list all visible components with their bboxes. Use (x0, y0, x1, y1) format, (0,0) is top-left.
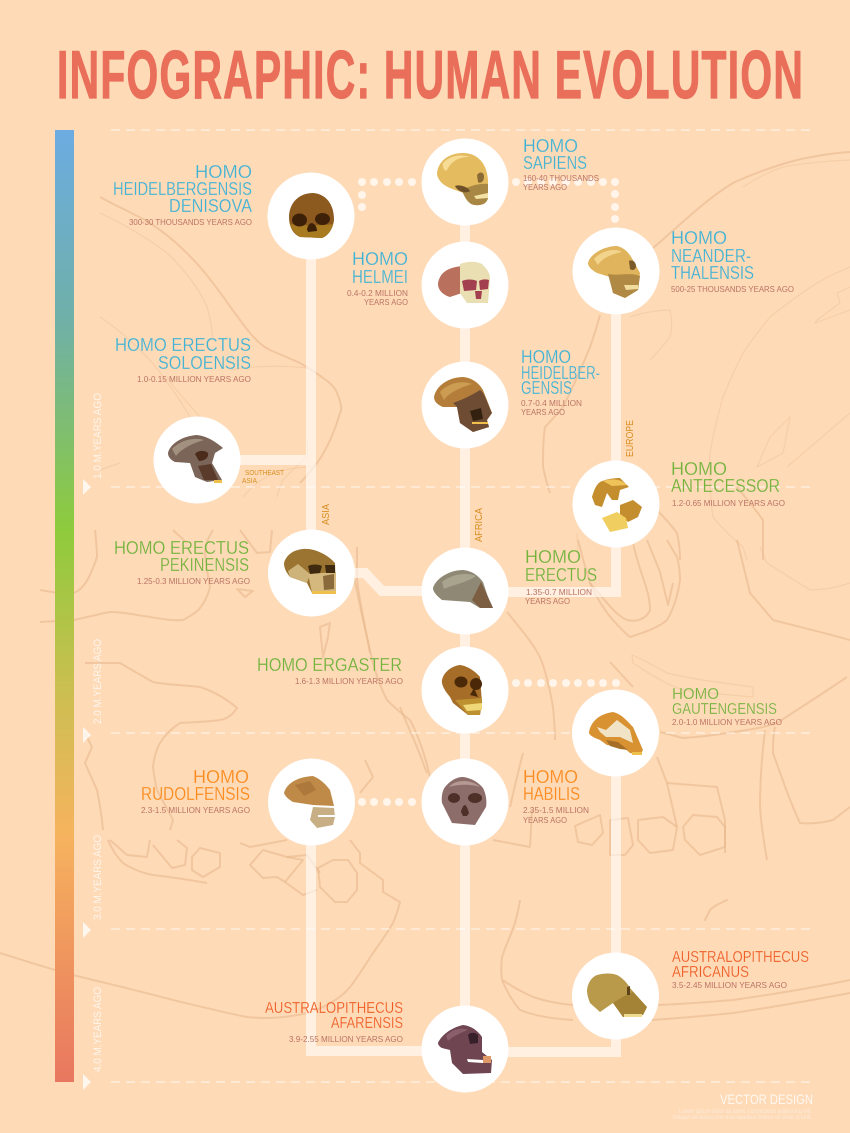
label: homo gautengensis (672, 686, 782, 727)
label: homo sapiens (523, 136, 599, 192)
label: homo habilis: HABILIS (523, 784, 580, 804)
label: homo sapiens: SAPIENS (523, 153, 587, 173)
skull: homo gautengensis (572, 690, 659, 776)
skull: homo habilis (422, 758, 508, 846)
timeline labels: 3.0 M.YEARS AGO (92, 835, 104, 920)
label: homo antecessor (671, 459, 785, 508)
label: homo erectus: YEARS AGO (525, 596, 570, 606)
label: homo habilis: YEARS AGO (523, 815, 567, 825)
time divider dashed lines (111, 130, 813, 1082)
label: homo gautengensis: HOMO (672, 686, 719, 703)
label: australopithecus afarensis: AUSTRALOPITHECUS (265, 1000, 403, 1017)
label: homo rudolfensis: 2.3-1.5 MILLION YEARS AGO (141, 805, 250, 815)
label: homo heidelbergensis denisova: HEIDELBERGENSIS (113, 179, 252, 199)
label: homo neanderthalensis (671, 228, 794, 294)
skull: homo helmei (422, 242, 508, 328)
region labels: EUROPE (625, 420, 636, 457)
label: homo neanderthalensis: NEANDER- (671, 246, 751, 266)
label: homo antecessor: ANTECESSOR (671, 476, 780, 496)
label: homo heidelbergensis: 0.7-0.4 MILLION (521, 398, 582, 408)
label: homo erectus soloensis: 1.0-0.15 MILLION YEARS AGO (137, 374, 251, 384)
label: australopithecus africanus: AFRICANUS (672, 964, 749, 981)
label: homo erectus soloensis: HOMO ERECTUS (115, 335, 251, 355)
label: homo helmei: YEARS AGO (364, 297, 408, 307)
label: homo helmei: HOMO (352, 249, 408, 269)
label: homo heidelbergensis (521, 347, 600, 417)
label: homo ergaster: 1.6-1.3 MILLION YEARS AGO (295, 676, 403, 686)
timeline markers (83, 479, 91, 1090)
label: australopithecus afarensis: AFARENSIS (331, 1015, 403, 1032)
label: homo habilis: HOMO (523, 767, 578, 787)
skull: homo antecessor fragments (572, 460, 660, 548)
credit block: VECTOR DESIGN (720, 1091, 813, 1107)
lineage connector lines (197, 182, 616, 1052)
region labels (242, 420, 636, 542)
credit block: Lorem ipsum dolor sit amet, consectetur adipiscing elit. (679, 1109, 812, 1115)
label: homo gautengensis: GAUTENGENSIS (672, 701, 777, 718)
skull: homo erectus (422, 548, 508, 634)
label: homo erectus: HOMO (525, 547, 581, 567)
timeline labels: 2.0 M.YEARS AGO (92, 639, 104, 724)
label: homo rudolfensis: RUDOLFENSIS (141, 784, 250, 804)
timeline labels (92, 393, 104, 1072)
label: homo erectus: ERECTUS (525, 565, 597, 585)
label: homo heidelbergensis: GENSIS (521, 378, 572, 398)
label: homo helmei: HELMEI (352, 267, 408, 287)
label: homo erectus soloensis (115, 335, 251, 384)
label: homo erectus pekinensis: 1.25-0.3 MILLION YEARS AGO (137, 576, 250, 586)
label: homo heidelbergensis denisova: 300-30 THOUSANDS YEARS AGO (129, 217, 252, 227)
dotted connections (358, 178, 620, 806)
region labels: ASIA (242, 476, 257, 485)
label: homo habilis: 2.35-1.5 MILLION (523, 805, 589, 815)
label: homo sapiens: 160-40 THOUSANDS (523, 173, 599, 183)
skull: homo ergaster (422, 646, 508, 734)
skull: homo heidelbergensis (422, 362, 508, 448)
label: australopithecus africanus (672, 949, 809, 990)
label: homo erectus pekinensis: PEKINENSIS (160, 555, 249, 575)
skull: australopithecus africanus (572, 952, 659, 1040)
timeline labels: 4.0 M.YEARS AGO (92, 987, 104, 1072)
label: homo rudolfensis: HOMO (193, 767, 249, 787)
skull: homo rudolfensis (268, 758, 355, 846)
label: homo antecessor: HOMO (671, 459, 727, 479)
skull: homo sapiens (422, 138, 508, 226)
label: australopithecus afarensis: 3.9-2.55 MILLION YEARS AGO (289, 1034, 403, 1044)
label: homo neanderthalensis: HOMO (671, 228, 727, 248)
label: homo erectus (525, 547, 597, 606)
skull: homo neanderthalensis (572, 228, 660, 314)
region labels: SOUTHEAST (245, 468, 284, 477)
skull: australopithecus afarensis (422, 1006, 508, 1092)
label: homo helmei (347, 249, 408, 307)
label: homo sapiens: YEARS AGO (523, 182, 567, 192)
region labels: AFRICA (474, 508, 485, 542)
label: homo erectus: 1.35-0.7 MILLION (526, 587, 592, 597)
label: homo heidelbergensis: YEARS AGO (521, 407, 565, 417)
label: homo antecessor: 1.2-0.65 MILLION YEARS AGO (672, 498, 785, 508)
label: australopithecus africanus: AUSTRALOPITHECUS (672, 949, 809, 966)
label: homo heidelbergensis denisova: HOMO (195, 162, 252, 182)
label: homo erectus pekinensis: HOMO ERECTUS (114, 538, 249, 558)
label: homo ergaster: HOMO ERGASTER (257, 655, 402, 675)
label: homo erectus soloensis: SOLOENSIS (158, 353, 251, 373)
label: homo heidelbergensis denisova: DENISOVA (169, 196, 252, 216)
title: INFOGRAPHIC: HUMAN EVOLUTION (57, 36, 803, 113)
label: homo heidelbergensis denisova (113, 162, 252, 227)
label: homo neanderthalensis: THALENSIS (671, 263, 754, 283)
region labels: ASIA (321, 504, 332, 525)
label: homo rudolfensis (141, 767, 250, 815)
timeline labels: 1.0 M.YEARS AGO (92, 393, 104, 479)
credit block: Integer vel lectus non erat faucibus finibus sit amet id velit. (673, 1115, 812, 1121)
timeline gradient bar (55, 130, 74, 1082)
label: homo heidelbergensis: HEIDELBER- (521, 363, 600, 383)
label: homo sapiens: HOMO (523, 136, 578, 156)
background: faint skull line art (0, 152, 850, 1020)
label: homo helmei: 0.4-0.2 MILLION (347, 288, 408, 298)
credit block (673, 1091, 813, 1121)
label: homo ergaster (257, 655, 403, 686)
skull: homo erectus pekinensis (268, 530, 355, 616)
label: homo neanderthalensis: 500-25 THOUSANDS YEARS AGO (671, 284, 794, 294)
skull: homo erectus soloensis (154, 416, 240, 504)
label: australopithecus afarensis (265, 1000, 403, 1044)
label: australopithecus africanus: 3.5-2.45 MILLION YEARS AGO (672, 980, 787, 990)
skull: homo heidelbergensis denisova (268, 172, 354, 260)
label: homo gautengensis: 2.0-1.0 MILLION YEARS AGO (672, 717, 782, 727)
label: homo heidelbergensis: HOMO (521, 347, 571, 367)
label: homo habilis (523, 767, 589, 825)
label: homo erectus pekinensis (114, 538, 250, 586)
